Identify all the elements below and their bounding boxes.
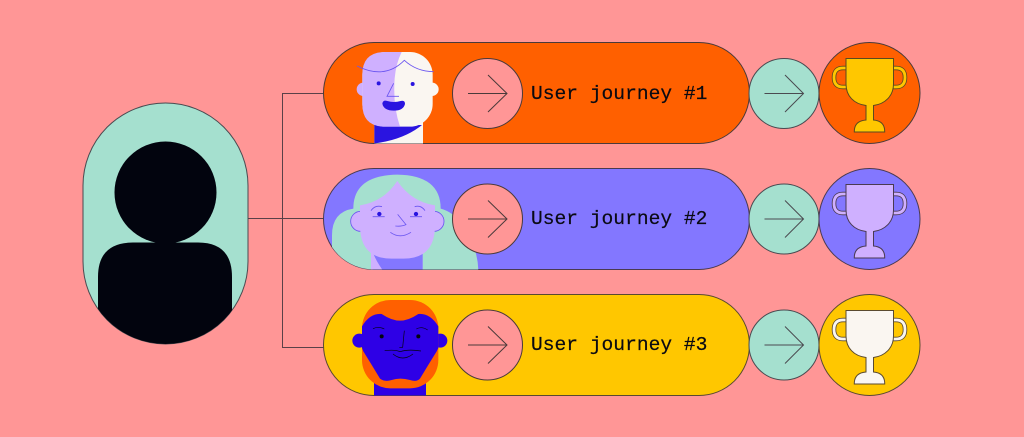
user avatar capsule (83, 103, 248, 350)
icon: user head (114, 142, 216, 244)
trophy badge 3 (819, 294, 920, 396)
icon: trophy 3 (834, 310, 905, 384)
trophy badge 1 (819, 42, 920, 144)
illustration: face 1 (357, 52, 439, 145)
illustration: face 2 (332, 175, 478, 272)
arrow button 3 (452, 310, 522, 380)
arrow button 2 (452, 184, 522, 254)
arrow connector 3 (749, 310, 819, 380)
label 3: User journey #3 (531, 334, 707, 356)
icon: user body (98, 242, 232, 350)
panel: user journey 1 (324, 42, 750, 145)
arrow button 1 (452, 58, 522, 128)
label 2: User journey #2 (531, 208, 707, 230)
arrow connector 1 (749, 58, 819, 128)
panel: user journey 2 (324, 168, 750, 272)
illustration: face 3 (352, 300, 447, 398)
infographic canvas (82, 42, 920, 396)
panel: user journey 3 (324, 294, 750, 398)
connector lines (248, 94, 324, 348)
icon: trophy 1 (834, 58, 905, 132)
icon: trophy 2 (834, 184, 905, 258)
arrow connector 2 (749, 184, 819, 254)
trophy badge 2 (819, 168, 920, 270)
label 1: User journey #1 (531, 83, 707, 105)
